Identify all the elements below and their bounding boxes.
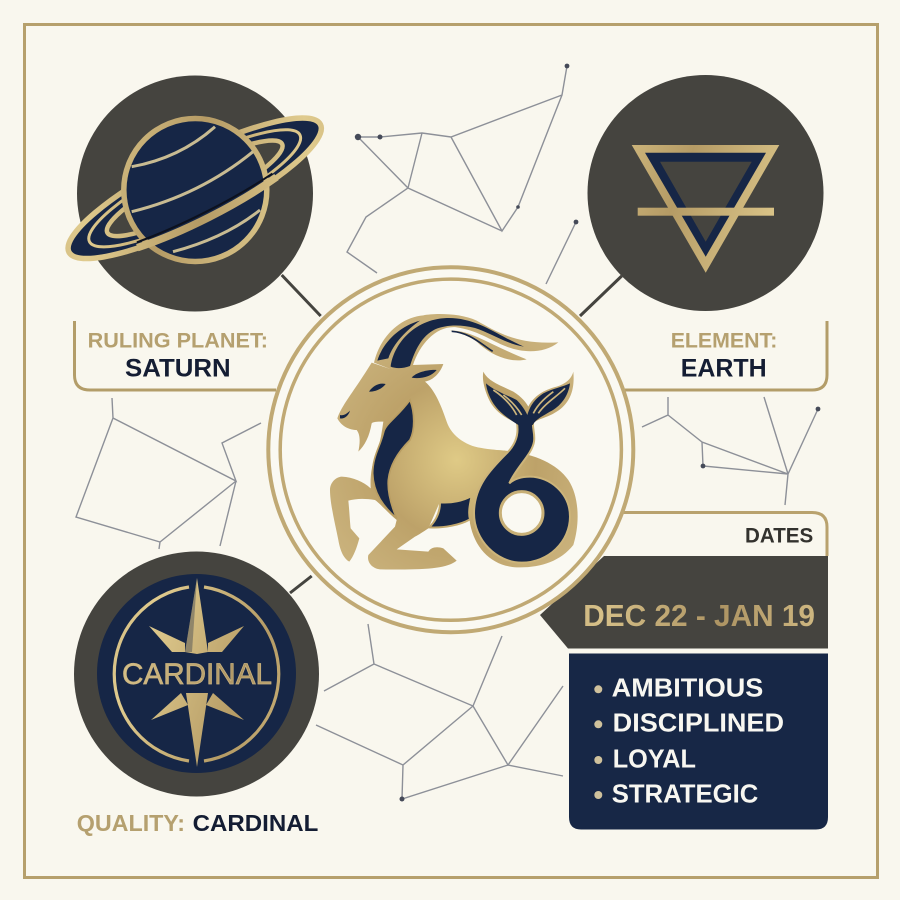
star shaded half — [185, 578, 197, 652]
value: cardinal: CARDINAL — [193, 810, 318, 836]
constellation: top — [347, 64, 578, 284]
dates bracket — [620, 512, 827, 556]
fluke fin lines — [493, 388, 565, 415]
constellation: right — [642, 397, 820, 505]
saturn planet — [124, 118, 267, 262]
goat eye — [369, 384, 386, 392]
trait: disciplined: DISCIPLINED — [613, 708, 784, 738]
panel: element — [588, 75, 827, 390]
horn navy back — [377, 321, 420, 361]
goat ear — [412, 370, 437, 378]
dates dark banner — [540, 556, 828, 648]
panel: quality — [74, 552, 319, 836]
saturn back rings — [54, 95, 335, 282]
fluke gold — [483, 372, 574, 423]
bracket: ruling planet — [74, 321, 276, 390]
panel: dates — [540, 512, 828, 830]
icon: cardinal — [74, 552, 319, 796]
horn navy main — [391, 318, 524, 368]
label: ruling planet: RULING PLANET: — [88, 328, 268, 352]
label: element: ELEMENT: — [671, 328, 777, 352]
earth bar — [638, 208, 774, 216]
value: date range: DEC 22 - JAN 19 — [583, 598, 815, 633]
goat nostril — [340, 411, 350, 419]
earth gold triangle — [632, 145, 779, 273]
label: quality: QUALITY: — [77, 810, 185, 836]
fluke navy — [486, 383, 570, 425]
earth inner triangle — [660, 162, 752, 242]
constellation: left — [76, 398, 261, 549]
cardinal dark circle — [74, 552, 319, 796]
cardinal star — [149, 578, 244, 767]
horn sliver shadow — [452, 331, 493, 351]
cardinal wordmark: CARDINAL — [122, 658, 272, 691]
trait: ambitious: AMBITIOUS — [612, 673, 763, 703]
tail coil navy — [474, 422, 570, 563]
belly navy — [429, 496, 472, 528]
icon: capricorn sea-goat — [330, 314, 578, 570]
medallion outer ring — [268, 267, 633, 632]
tail coil hole — [500, 492, 543, 534]
panel: traits — [569, 654, 828, 830]
panel: ruling planet — [54, 76, 335, 390]
constellation: bottom — [316, 624, 563, 802]
cardinal gold ring — [114, 587, 279, 761]
saturn front ring — [135, 173, 279, 252]
saturn dark circle — [77, 76, 313, 312]
earth dark circle — [588, 75, 824, 311]
central medallion — [268, 267, 633, 632]
bracket: element — [625, 321, 827, 390]
constellation lines — [76, 64, 820, 802]
goat body — [330, 363, 505, 570]
medallion inner ring — [280, 279, 621, 620]
trait: loyal: LOYAL — [613, 744, 696, 774]
cardinal navy disc — [97, 574, 296, 773]
saturn bands — [132, 127, 260, 252]
traits navy box — [569, 654, 828, 830]
value: earth: EARTH — [681, 355, 767, 383]
tail gold back — [457, 440, 578, 567]
icon: saturn — [54, 76, 335, 312]
label: dates: DATES — [745, 525, 813, 548]
second horn sliver — [450, 331, 527, 360]
earth navy triangle — [645, 153, 766, 257]
trait: strategic: STRATEGIC — [612, 779, 759, 809]
value: saturn: SATURN — [125, 355, 231, 383]
chest navy — [373, 400, 414, 518]
connector lines — [282, 275, 622, 593]
horn gold — [374, 314, 558, 369]
icon: earth — [588, 75, 824, 311]
